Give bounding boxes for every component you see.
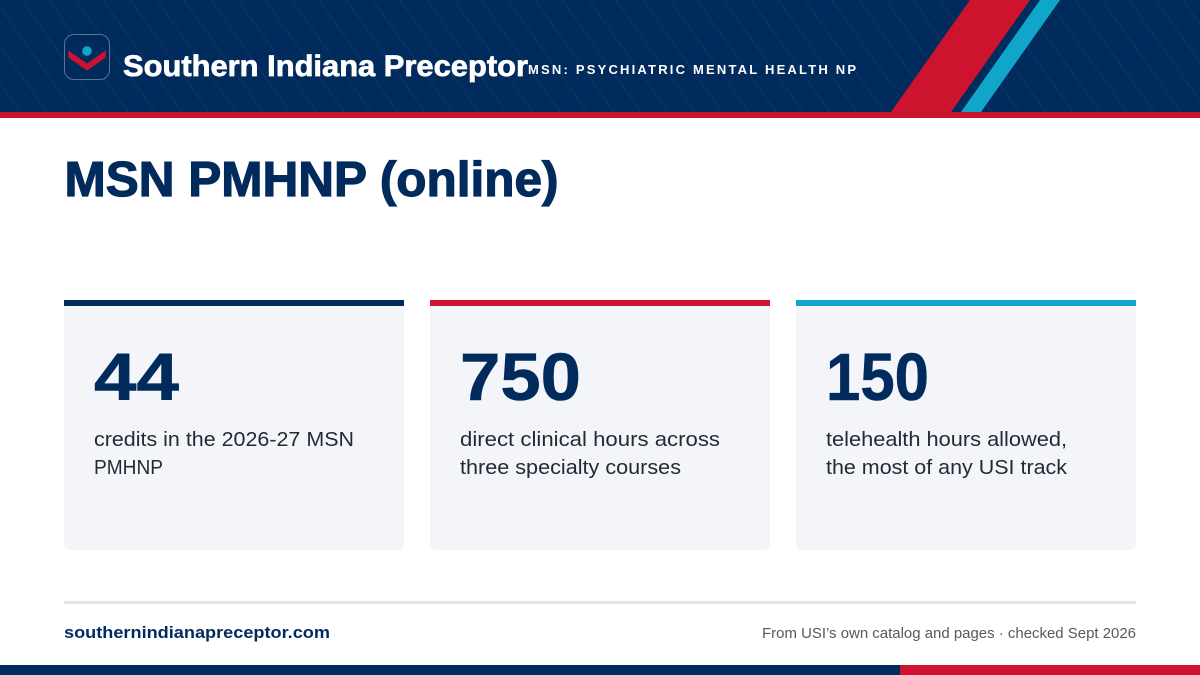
brand name: Southern Indiana Preceptor (123, 50, 528, 83)
stat: 44: 44 (94, 340, 179, 415)
header red rule (0, 112, 1200, 118)
header cyan diagonal stripe (961, 0, 1060, 112)
footer colour bar (0, 665, 1200, 675)
stat: 150: 150 (826, 340, 929, 415)
stat: 750: 750 (460, 340, 581, 415)
header band (0, 0, 1200, 118)
title: MSN PMHNP (online) (64, 153, 558, 207)
credits description: credits in the 2026-27 MSN (94, 429, 354, 451)
footer source note: From USI’s own catalog and pages · checked Sept 2026 (762, 626, 1136, 642)
panel: telehealth hours (796, 300, 1136, 550)
telehealth description: telehealth hours allowed, (826, 429, 1067, 451)
clinical hours description: three specialty courses (460, 457, 681, 479)
panel: credits (64, 300, 404, 550)
program label: MSN: PSYCHIATRIC MENTAL HEALTH NP (528, 62, 856, 77)
header red diagonal stripe (891, 0, 1030, 112)
footer website: southernindianapreceptor.com (64, 623, 330, 642)
telehealth description: the most of any USI track (826, 457, 1068, 479)
credits description: PMHNP (94, 457, 163, 479)
clinical hours description: direct clinical hours across (460, 429, 720, 451)
panel: clinical hours (430, 300, 770, 550)
icon: logo badge (64, 34, 110, 80)
